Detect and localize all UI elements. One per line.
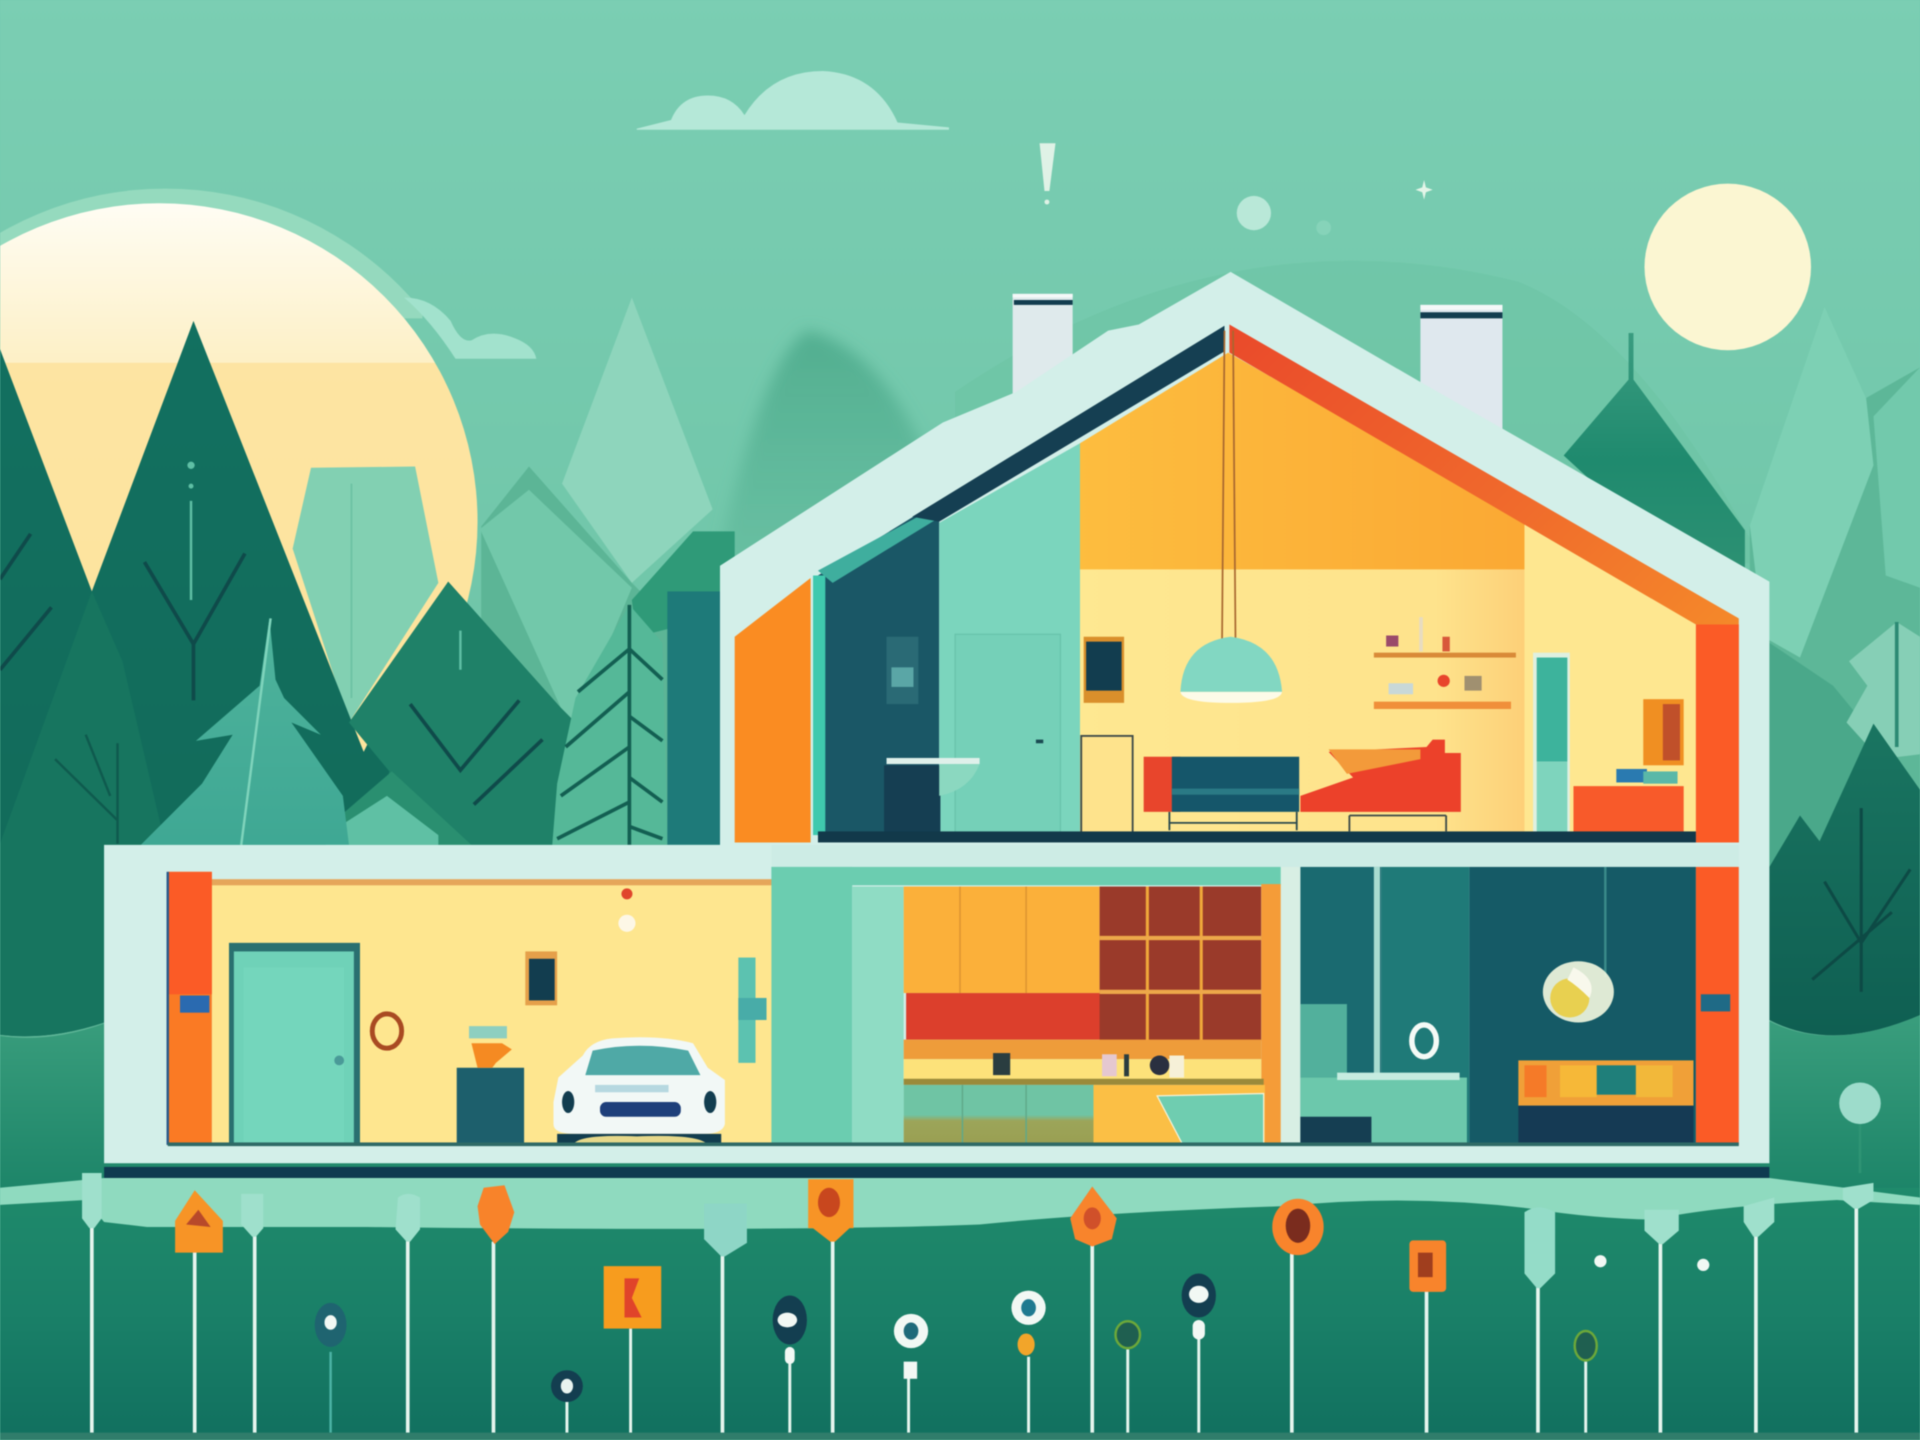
- rooftop tree right: [1564, 333, 1745, 588]
- branch lines: [0, 534, 542, 804]
- big sun left: [0, 188, 536, 752]
- bottom edge haze: [0, 1433, 1920, 1440]
- floor line: [818, 831, 1696, 842]
- lower cabinets: [904, 1085, 1095, 1145]
- backsplash with items: [904, 1053, 1261, 1080]
- background forest right: [1750, 306, 1920, 882]
- distant hill behind roof: [955, 261, 1763, 563]
- right red strip: [1696, 867, 1739, 1145]
- upper storey: [735, 324, 1739, 842]
- stool cabinet: [1081, 736, 1133, 833]
- window: [1084, 637, 1124, 703]
- glowing lamp: [1543, 961, 1614, 1022]
- teal side door: [1533, 653, 1570, 836]
- ring markers: [894, 1291, 1046, 1379]
- sink: [1157, 1093, 1264, 1145]
- box and figure: [457, 1026, 524, 1145]
- green markers: [1116, 1321, 1597, 1360]
- side annex wall: [667, 591, 722, 845]
- brick shelf grid: [1100, 887, 1261, 1041]
- garage wall: [212, 884, 773, 1145]
- wall panel: [887, 637, 918, 704]
- mint wall: [771, 867, 852, 1145]
- orange window: [1643, 699, 1684, 765]
- dark room: [1300, 867, 1696, 1145]
- upper kitchen cabinets: [904, 887, 1100, 993]
- small dots: [1594, 1255, 1709, 1271]
- moon and sparkles: [1237, 180, 1811, 350]
- fir: striped right: [552, 605, 667, 845]
- room ring: [1412, 1025, 1436, 1057]
- counter: [904, 1079, 1264, 1085]
- white column: [1281, 867, 1302, 1145]
- pale trapezoid tree: [293, 467, 438, 722]
- pendant lamp: [1180, 637, 1282, 703]
- small green mound tree: [321, 771, 471, 845]
- right round marker: [1839, 1082, 1881, 1173]
- light mint column: [852, 887, 904, 1145]
- pale diamond tree: [562, 298, 713, 583]
- yellow wall: [1080, 569, 1524, 835]
- wall ring: [372, 1014, 402, 1048]
- pale heads: [82, 1173, 1873, 1288]
- dark forest right: [1769, 724, 1920, 1035]
- chimney left: [1013, 294, 1073, 404]
- garage door: [229, 943, 360, 1144]
- car: [553, 1037, 725, 1145]
- light band under house: [0, 1178, 1920, 1229]
- white stems: [92, 1206, 1856, 1433]
- pale fir: [1847, 622, 1920, 759]
- dark wall: [818, 504, 939, 835]
- lower left shade: [0, 591, 165, 1036]
- fir: pale left: [141, 618, 349, 845]
- lower storey: [167, 867, 1739, 1146]
- orange side: [1261, 884, 1281, 1145]
- yellow floor: [1093, 1085, 1265, 1145]
- dark fir trees left: [0, 321, 667, 1036]
- small window: [525, 951, 557, 1005]
- teal skylight: [818, 512, 937, 583]
- pipe fixture: [738, 958, 767, 1063]
- orange wall: [735, 578, 811, 842]
- green band near annex: [632, 531, 735, 637]
- dark round markers: [315, 1273, 1216, 1402]
- mountain right part: [349, 582, 588, 845]
- striped desk: [1518, 1060, 1693, 1145]
- orange left strip: [167, 872, 212, 1145]
- gable orange: [1080, 353, 1524, 571]
- exclamation mark accent: [1040, 143, 1056, 204]
- door: [955, 634, 1060, 835]
- red roof strip: [1229, 324, 1739, 842]
- base shadow: [104, 1167, 1769, 1178]
- navy roof strip: [912, 326, 1224, 522]
- garage floor line: [168, 1142, 1739, 1146]
- house: [104, 272, 1769, 1178]
- lower ground: [0, 1188, 1920, 1440]
- bath block: [1300, 1004, 1467, 1145]
- mint wall: [939, 443, 1080, 835]
- orange sign heads: [175, 1179, 1446, 1329]
- soft mid mountain: [481, 467, 686, 845]
- wall lights: [618, 888, 636, 932]
- chimney right: [1420, 305, 1502, 440]
- cloud: top: [637, 71, 949, 130]
- right yellow wall: [1524, 520, 1696, 835]
- pendant wires: [1222, 331, 1236, 643]
- upper ground: [0, 1015, 1920, 1195]
- orange band: [904, 1040, 1261, 1059]
- red cabinet: [1573, 769, 1684, 833]
- house shell: [104, 272, 1769, 1163]
- background forest left: [480, 298, 931, 845]
- red band: [906, 993, 1102, 1040]
- sofa: [1144, 740, 1461, 831]
- shelves: [1374, 617, 1516, 709]
- signposts: [82, 1173, 1873, 1433]
- dark sink stand: [884, 758, 980, 835]
- floor slab: [771, 845, 1739, 867]
- pipe: [813, 576, 825, 835]
